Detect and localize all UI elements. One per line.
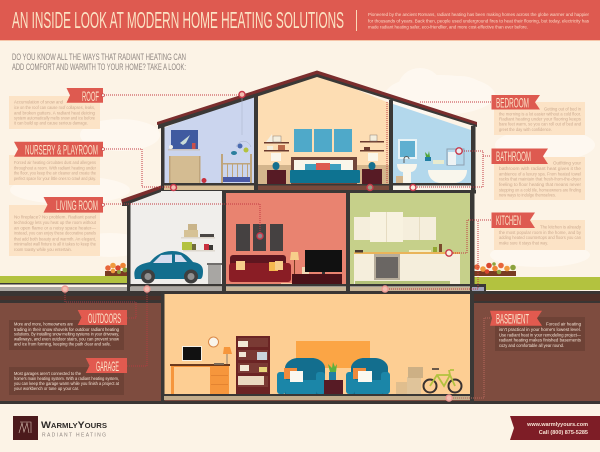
callout: nursery and playroom: perfect space for your little ones to crawl and play. — [14, 176, 96, 181]
boxes — [396, 367, 423, 394]
callout: bedroom: Radiant heating under your flooring keeps — [499, 117, 582, 122]
callout: basement: BASEMENT — [496, 310, 529, 326]
callout: living room: technology lets you heat up the room without — [14, 220, 97, 225]
callout: roof: ROOF — [82, 88, 99, 104]
callout: garage: Most garages aren't connected to the — [14, 371, 81, 376]
living room — [229, 224, 342, 284]
callout: outdoors: solutions. By installing snow melting systems in your driveway, — [14, 332, 119, 337]
callout: basement: Use radiant heat in your remodeling project— — [499, 332, 581, 337]
armchair right — [346, 358, 390, 394]
callout: nursery and playroom: throughout a room. With radiant heating under — [14, 165, 96, 170]
callout: living room: LIVING ROOM — [56, 197, 98, 213]
upper floor rooms — [158, 73, 476, 194]
callout: bedroom: Getting out of bed in — [544, 106, 581, 112]
callout: bedroom: greet the day with confidence. — [499, 127, 552, 132]
flowers right — [474, 262, 516, 276]
callout: kitchen: make sure it stays that way. — [499, 240, 548, 245]
callout: nursery and playroom: the floor, you keep the air cleaner and create the — [14, 171, 96, 176]
callout: living room: that add both beauty and warmth. An elegant, — [14, 236, 96, 242]
basement room — [161, 291, 474, 403]
garage — [134, 224, 222, 284]
contact banner: Call (800) 875-5285 — [539, 430, 588, 436]
callout: roof: Accumulation of snow and — [14, 100, 63, 105]
bookshelf — [236, 336, 270, 394]
callout: bathroom: racks that maintain that fresh-from-the-dryer — [499, 177, 581, 182]
callout: bathroom: new ways to indulge themselves. — [499, 192, 556, 197]
subheading: DO YOU KNOW ALL THE WAYS THAT RADIANT HEATING CAN — [12, 52, 186, 63]
house — [121, 70, 486, 403]
callout: outdoors: trading in their snow shovels for outdoor radiant heating — [14, 327, 119, 332]
callout: bathroom: BATHROOM — [496, 148, 531, 164]
callout: roof: and broken gutters. A radiant heat deicing — [14, 110, 95, 116]
callout: kitchen — [492, 212, 585, 250]
intro text: for thousands of years. Back then, people used underground fires to heat their flooring, but today, electricity has — [368, 18, 590, 23]
contact banner: www.warmlyyours.com — [526, 422, 588, 428]
ground floor rooms — [127, 191, 486, 293]
callout: kitchen: The kitchen is already — [540, 225, 582, 230]
callout: basement: radiant heating makes finished basements — [499, 338, 582, 343]
callout: bathroom: feeling to floor heating that means never — [499, 182, 582, 187]
callout: roof: it can build up and cause serious damage. — [14, 120, 88, 126]
callout: roof: ice on the roof can cause roof collapses, leaks, — [14, 105, 95, 110]
callout: garage: you can keep the garage warm while you finish a project at — [14, 381, 120, 386]
logo: RADIANT HEATING — [42, 432, 106, 438]
callout: living room: room toasty while you entertain. — [14, 247, 72, 252]
intro text: made radiant heating safer, eco-friendlier, and more cost-effective than ever before. — [368, 25, 528, 30]
ground and basement earth — [0, 276, 600, 404]
callout: basement — [490, 310, 585, 351]
kitchen — [354, 212, 460, 284]
callout: kitchen: the most popular room in the home, and by — [499, 230, 582, 235]
callout: garage — [9, 358, 127, 395]
logo — [13, 416, 107, 440]
callout: bedroom: the morning is a lot easier without a cold floor. — [499, 112, 581, 117]
callout: basement: cozy and comfortable all year round. — [499, 343, 564, 348]
nursery room — [168, 97, 252, 183]
callout: living room: an open flame or a noisy space heater— — [14, 225, 96, 230]
callout: bedroom: bare feet warm, so you can roll out of bed and — [499, 122, 581, 127]
hotspot markers — [62, 92, 462, 401]
intro text: Pioneered by the ancient Romans, radiant heating has been making homes across the globe warmer and happier — [368, 12, 589, 17]
subheading: ADD COMFORT AND WARMTH TO YOUR HOME? TAKE A LOOK: — [12, 62, 186, 73]
desk — [170, 337, 232, 394]
callout: nursery and playroom — [9, 142, 104, 185]
callout: roof: system automatically melts snow and ice before — [14, 116, 95, 120]
callout: living room — [9, 197, 104, 256]
callout: outdoors: walkways, and even outdoor stairs, you can prevent snow — [14, 337, 120, 342]
callout: basement: isn't practical in your home's lowest level. — [499, 327, 581, 332]
small gable roof — [121, 186, 161, 206]
text: OUTDOORS — [88, 310, 121, 326]
callout: bathroom: Outfitting your — [553, 161, 581, 166]
intro text — [368, 12, 590, 30]
contact banner — [510, 416, 600, 440]
callout: bathroom: bathroom with radiant heat gives it the — [499, 166, 582, 171]
callout: kitchen: KITCHEN — [496, 212, 521, 228]
callout: nursery and playroom: Forced air heating circulates dust and allergens — [14, 160, 97, 165]
callout: garage: your workbench or tune up your car. — [14, 386, 79, 391]
callout: bedroom — [492, 94, 585, 135]
callout: living room: minimalist wall fixture is all it takes to keep the — [14, 242, 96, 247]
callout: garage: home's main heating system. With a radiant heating system, — [14, 376, 119, 381]
callout: garage: GARAGE — [96, 358, 119, 374]
callout: bathroom: stepping on a cold tile, homeowners are finding — [499, 187, 581, 192]
dotted connector lines — [65, 95, 491, 398]
flowers left — [105, 263, 128, 276]
bathroom — [396, 139, 467, 183]
subheading — [12, 52, 186, 73]
logo: WARMLY YOURS — [41, 420, 107, 431]
callout: basement: Forced air heating — [546, 322, 581, 327]
bicycle — [424, 369, 462, 392]
callout: living room: instead, you can enjoy these decorative panels — [14, 231, 97, 236]
text: NURSERY & PLAYROOM — [25, 142, 98, 158]
callout: bedroom: BEDROOM — [496, 94, 529, 110]
callout: roof — [9, 88, 104, 129]
callout: outdoors — [9, 310, 127, 350]
master bedroom — [258, 129, 389, 184]
callout: bathroom — [492, 148, 585, 200]
header banner — [0, 0, 600, 41]
callout: outdoors: and ice from forming, keeping the path clear and safe. — [14, 342, 111, 346]
callout: kitchen: adding heated countertops and floors you can — [499, 235, 581, 240]
side table and plant — [324, 362, 343, 394]
callout: outdoors: More and more, homeowners are — [14, 322, 73, 326]
main roof — [157, 70, 477, 129]
callout: living room: No fireplace? No problem. Radiant panel — [14, 215, 96, 220]
armchair left — [277, 358, 325, 394]
callout: bathroom: ambience of a luxury spa. From heated towel — [499, 171, 581, 176]
